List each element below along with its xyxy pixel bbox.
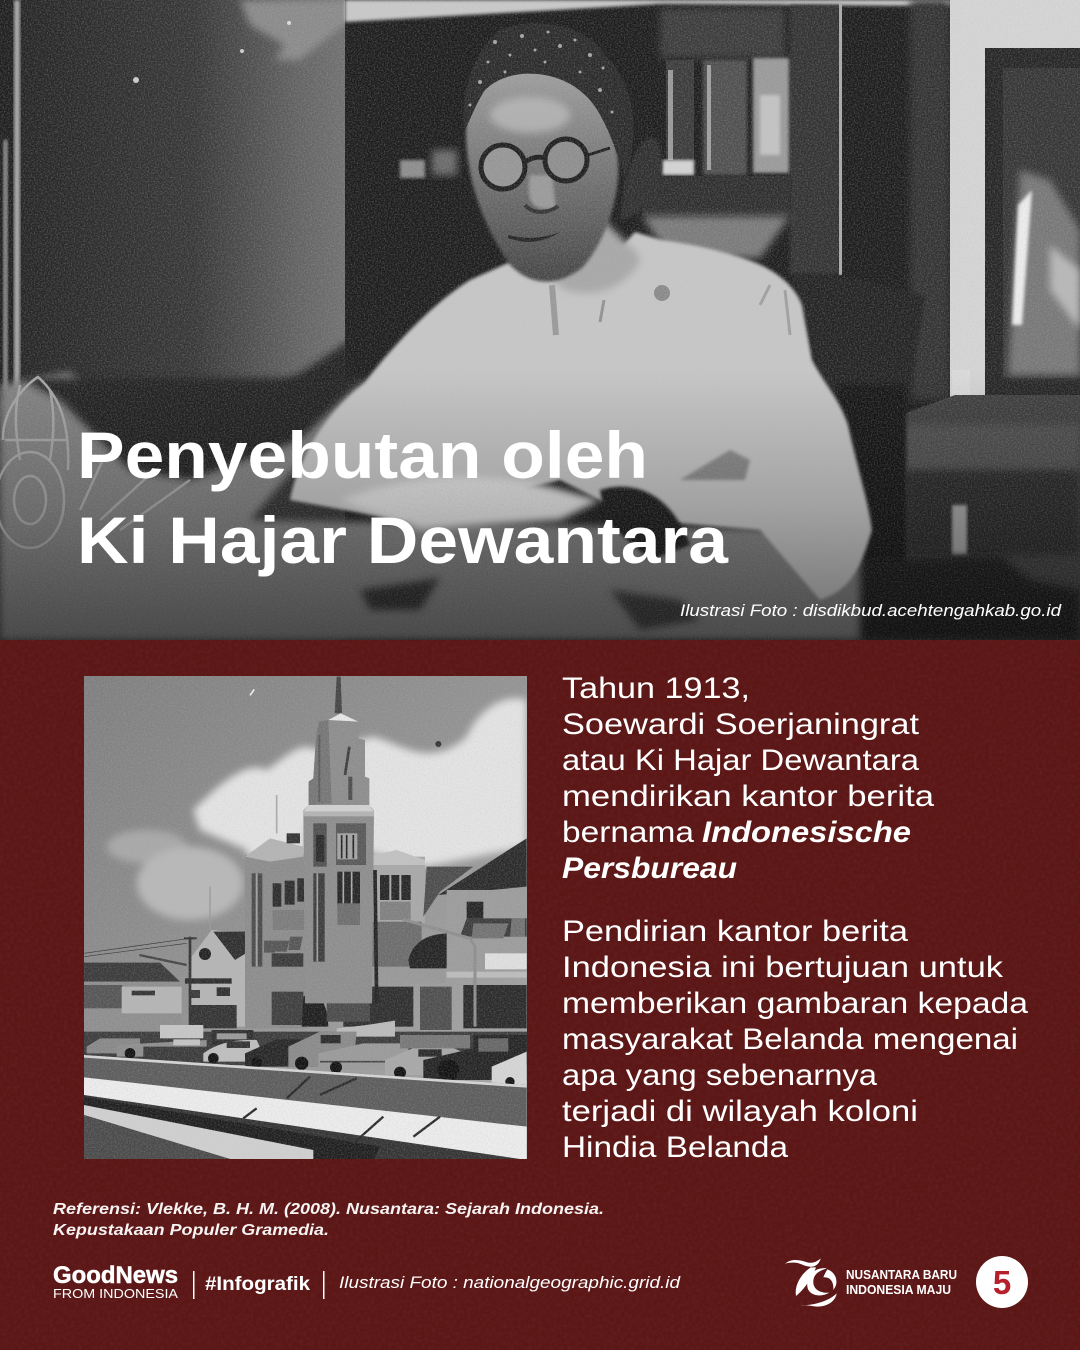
body text: paragraph two — [562, 915, 1028, 1164]
photo area: arm and hands — [340, 450, 750, 630]
logo text: Nusantara Baru Indonesia Maju — [846, 1268, 957, 1297]
body text: paragraph one — [562, 672, 934, 885]
photo area: lower left table and emblem — [0, 372, 860, 640]
photo area: left low roofs — [84, 887, 247, 1032]
photo area: clouds — [107, 698, 527, 920]
reference citation — [53, 1201, 604, 1239]
logo: GoodNews from Indonesia: GoodNews — [53, 1262, 178, 1289]
body text: paragraph two: Hindia Belanda — [562, 1131, 788, 1164]
hero photo: portrait of Ki Hajar Dewantara — [0, 0, 1080, 640]
photo area: main building — [245, 795, 450, 1028]
photo area: cabinet — [343, 0, 950, 528]
photo area: white shirt — [290, 232, 872, 600]
photo area: canal wall — [84, 689, 527, 1160]
photo credit: hero: Ilustrasi Foto : disdikbud.acehtengahkab.go.id — [680, 601, 1062, 620]
photo area: wall and framed painting — [950, 0, 1080, 400]
logo text: Nusantara Baru Indonesia Maju: INDONESIA MAJU — [846, 1283, 951, 1297]
photo area: parked cars — [84, 1021, 527, 1086]
body text: paragraph two: Pendirian kantor berita — [562, 915, 908, 948]
title: Ki Hajar Dewantara — [77, 503, 729, 577]
body text: paragraph one: Indonesische — [702, 816, 911, 849]
body text: paragraph two: masyarakat Belanda mengenai — [562, 1023, 1018, 1056]
photo area: head with cap and glasses — [464, 23, 662, 293]
body text: paragraph two: memberikan gambaran kepada — [562, 987, 1028, 1020]
title: Penyebutan oleh — [77, 418, 648, 492]
body text: paragraph two: apa yang sebenarnya — [562, 1059, 877, 1092]
photo area: chair — [839, 274, 925, 374]
photo area: clock tower — [303, 677, 377, 1003]
body text: paragraph one: Soewardi Soerjaningrat — [562, 708, 920, 741]
body text: paragraph one: Tahun 1913, — [562, 672, 750, 705]
body text: paragraph one: bernama — [562, 816, 694, 849]
page number badge — [976, 1256, 1028, 1308]
body text: paragraph two: terjadi di wilayah koloni — [562, 1095, 918, 1128]
photo area: right buildings — [403, 838, 527, 1030]
background: maroon panel — [0, 640, 1080, 1350]
photo area: table on right — [838, 384, 1080, 640]
photo credit: building: Ilustrasi Foto : nationalgeographic.grid.id — [339, 1273, 681, 1292]
title — [77, 418, 729, 577]
body text: paragraph two: Indonesia ini bertujuan untuk — [562, 951, 1004, 984]
page number badge: 5 — [993, 1264, 1011, 1301]
hashtag: Infografik: #Infografik — [205, 1274, 310, 1295]
logo text: Nusantara Baru Indonesia Maju: NUSANTARA BARU — [846, 1268, 957, 1282]
body text: paragraph one: Persbureau — [562, 852, 737, 885]
photo area: left wall — [0, 0, 352, 400]
logo: GoodNews from Indonesia: FROM INDONESIA — [53, 1286, 178, 1301]
logo: GoodNews from Indonesia — [53, 1262, 178, 1301]
photo: colonial building with clock tower — [84, 676, 527, 1160]
reference citation: Kepustakaan Populer Gramedia. — [53, 1222, 329, 1239]
logo: 79 anniversary emblem — [785, 1258, 837, 1307]
reference citation: Referensi: Vlekke, B. H. M. (2008). Nusantara: Sejarah Indonesia. — [53, 1201, 604, 1218]
body text: paragraph one: mendirikan kantor berita — [562, 780, 934, 813]
body text: paragraph one: atau Ki Hajar Dewantara — [562, 744, 919, 777]
